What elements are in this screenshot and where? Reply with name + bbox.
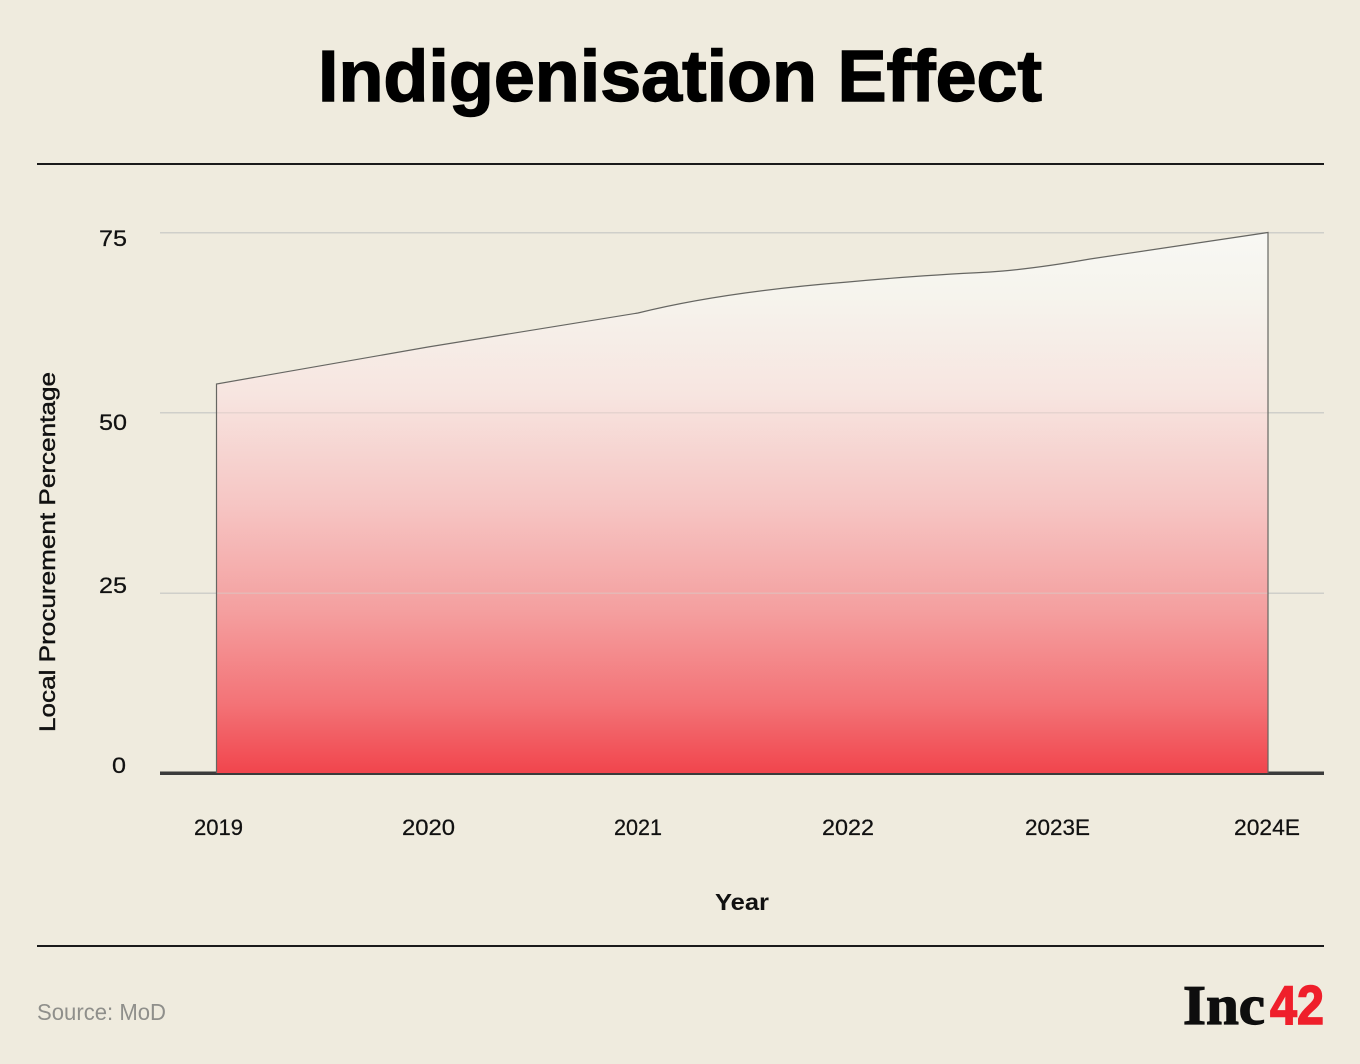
title: Indigenisation Effect bbox=[318, 37, 1042, 117]
x axis tick labels: 2019 bbox=[194, 815, 243, 840]
logo: Inc42 bbox=[1183, 974, 1324, 1037]
area chart bbox=[35, 226, 1324, 915]
y axis tick labels: 75 bbox=[99, 226, 127, 251]
x axis tick labels: 2022 bbox=[822, 815, 874, 840]
source note: Source: MoD bbox=[37, 999, 166, 1025]
x axis tick labels: 2021 bbox=[614, 815, 662, 840]
logo: Inc42: Inc bbox=[1183, 975, 1265, 1037]
x axis tick labels: 2023E bbox=[1025, 815, 1090, 840]
x axis tick labels bbox=[194, 815, 1300, 840]
x axis tick labels: 2020 bbox=[402, 815, 455, 840]
logo: Inc42: 42 bbox=[1270, 974, 1324, 1036]
y axis tick labels: 50 bbox=[99, 410, 127, 435]
area outline bbox=[216, 232, 1268, 773]
x axis title: Year bbox=[715, 889, 769, 915]
y axis tick labels: 25 bbox=[99, 573, 127, 598]
gridlines through area bbox=[217, 412, 1268, 594]
baseline axis bbox=[160, 772, 1324, 775]
y axis tick labels bbox=[99, 226, 127, 778]
y axis tick labels: 0 bbox=[112, 753, 126, 778]
x axis tick labels: 2024E bbox=[1234, 815, 1300, 840]
y axis title: Local Procurement Percentage bbox=[35, 372, 60, 732]
area series: local procurement percentage bbox=[216, 232, 1268, 773]
